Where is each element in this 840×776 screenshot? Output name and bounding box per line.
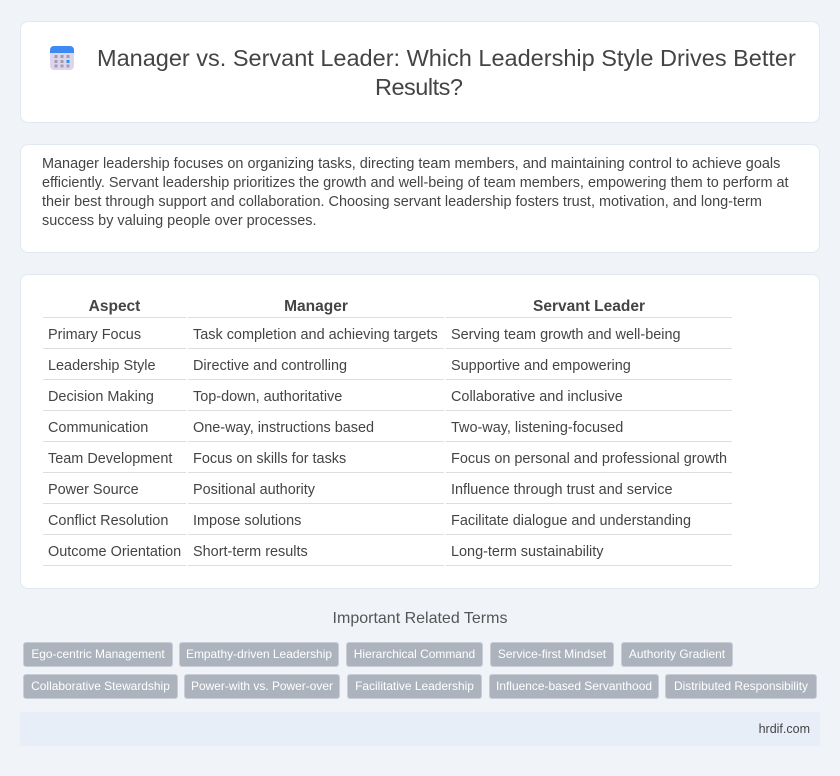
row: Primary Focus: Serving team growth and well-being bbox=[451, 327, 681, 343]
tag: Service-first Mindset: Service-first Mindset bbox=[498, 647, 606, 661]
row: Conflict Resolution bbox=[48, 513, 691, 529]
text block: introduction: efficiently. Servant leadership prioritizes the growth and well-being of team members, empowering them to perform at bbox=[42, 175, 789, 191]
row: Primary Focus: Task completion and achieving targets bbox=[193, 327, 438, 343]
heading: Important Related Terms: Important Related Terms bbox=[333, 610, 507, 627]
row: Power Source: Power Source bbox=[48, 482, 139, 498]
text block: introduction: their best through support and collaboration. Choosing servant leadership fosters trust, motivation, and long-term bbox=[42, 194, 762, 210]
icon: calendar bbox=[50, 46, 74, 70]
row: Team Development: Focus on personal and professional growth bbox=[451, 451, 727, 467]
title: Results? bbox=[375, 74, 462, 100]
text block: introduction: Manager leadership focuses on organizing tasks, directing team members, and maintaining control to achieve goals bbox=[42, 156, 780, 172]
tag: Authority Gradient bbox=[621, 642, 733, 667]
row: Decision Making: Decision Making bbox=[48, 389, 154, 405]
tag: Collaborative Stewardship bbox=[23, 674, 178, 699]
row: Outcome Orientation bbox=[48, 544, 604, 560]
tag: Influence-based Servanthood bbox=[489, 674, 659, 699]
tag: Facilitative Leadership bbox=[347, 674, 482, 699]
row: Power Source: Positional authority bbox=[193, 482, 315, 498]
text block: introduction: success by valuing people over processes. bbox=[42, 213, 316, 229]
row: Conflict Resolution: Facilitate dialogue and understanding bbox=[451, 513, 691, 529]
row: Primary Focus bbox=[48, 327, 681, 343]
column heading: Aspect: Aspect bbox=[89, 298, 140, 315]
row: Decision Making bbox=[48, 389, 623, 405]
text block: introduction bbox=[42, 156, 789, 229]
column heading: Manager: Manager bbox=[284, 298, 348, 315]
row: Decision Making: Collaborative and inclusive bbox=[451, 389, 623, 405]
tag: Empathy-driven Leadership bbox=[179, 642, 339, 667]
tag: Hierarchical Command bbox=[346, 642, 483, 667]
panel: title card bbox=[20, 21, 820, 123]
comparison table bbox=[42, 297, 732, 567]
tag: Facilitative Leadership: Facilitative Leadership bbox=[355, 679, 474, 693]
row: Communication: One-way, instructions based bbox=[193, 420, 374, 436]
panel: introduction bbox=[20, 144, 820, 253]
row: Leadership Style: Directive and controlling bbox=[193, 358, 347, 374]
tag: Empathy-driven Leadership: Empathy-driven Leadership bbox=[186, 647, 332, 661]
row: Leadership Style: Leadership Style bbox=[48, 358, 156, 374]
tag: Distributed Responsibility bbox=[665, 674, 817, 699]
footer bbox=[20, 712, 820, 746]
tag: Authority Gradient: Authority Gradient bbox=[629, 647, 725, 661]
tag: Hierarchical Command: Hierarchical Command bbox=[354, 647, 475, 661]
row: Decision Making: Top-down, authoritative bbox=[193, 389, 342, 405]
tag: Influence-based Servanthood: Influence-based Servanthood bbox=[496, 679, 652, 693]
title: Manager vs. Servant Leader: Which Leadership Style Drives Better bbox=[97, 45, 796, 71]
column heading: Servant Leader: Servant Leader bbox=[533, 298, 645, 315]
row: Outcome Orientation: Outcome Orientation bbox=[48, 544, 181, 560]
tag: Service-first Mindset bbox=[490, 642, 614, 667]
title bbox=[97, 45, 796, 100]
row: Leadership Style: Supportive and empowering bbox=[451, 358, 631, 374]
tag: Power-with vs. Power-over: Power-with vs. Power-over bbox=[191, 679, 333, 693]
row: Outcome Orientation: Short-term results bbox=[193, 544, 308, 560]
tag: Collaborative Stewardship: Collaborative Stewardship bbox=[31, 679, 170, 693]
row: Outcome Orientation: Long-term sustainability bbox=[451, 544, 603, 560]
row: Team Development: Team Development bbox=[48, 451, 172, 467]
row: Primary Focus: Primary Focus bbox=[48, 327, 141, 343]
tag: Ego-centric Management: Ego-centric Management bbox=[31, 647, 165, 661]
tag: Distributed Responsibility: Distributed Responsibility bbox=[674, 679, 808, 693]
row: Conflict Resolution: Conflict Resolution bbox=[48, 513, 168, 529]
tag: Ego-centric Management bbox=[23, 642, 173, 667]
tag: Power-with vs. Power-over bbox=[184, 674, 340, 699]
row: Communication: Two-way, listening-focused bbox=[451, 420, 623, 436]
footer source: hrdif.com bbox=[759, 722, 810, 736]
row: Power Source bbox=[48, 482, 673, 498]
row: Conflict Resolution: Impose solutions bbox=[193, 513, 301, 529]
panel: comparison table bbox=[20, 274, 820, 589]
row: Power Source: Influence through trust and service bbox=[451, 482, 673, 498]
row: Communication bbox=[48, 420, 623, 436]
row: Communication: Communication bbox=[48, 420, 148, 436]
row: Team Development: Focus on skills for tasks bbox=[193, 451, 346, 467]
row: Team Development bbox=[48, 451, 727, 467]
row: Leadership Style bbox=[48, 358, 631, 374]
